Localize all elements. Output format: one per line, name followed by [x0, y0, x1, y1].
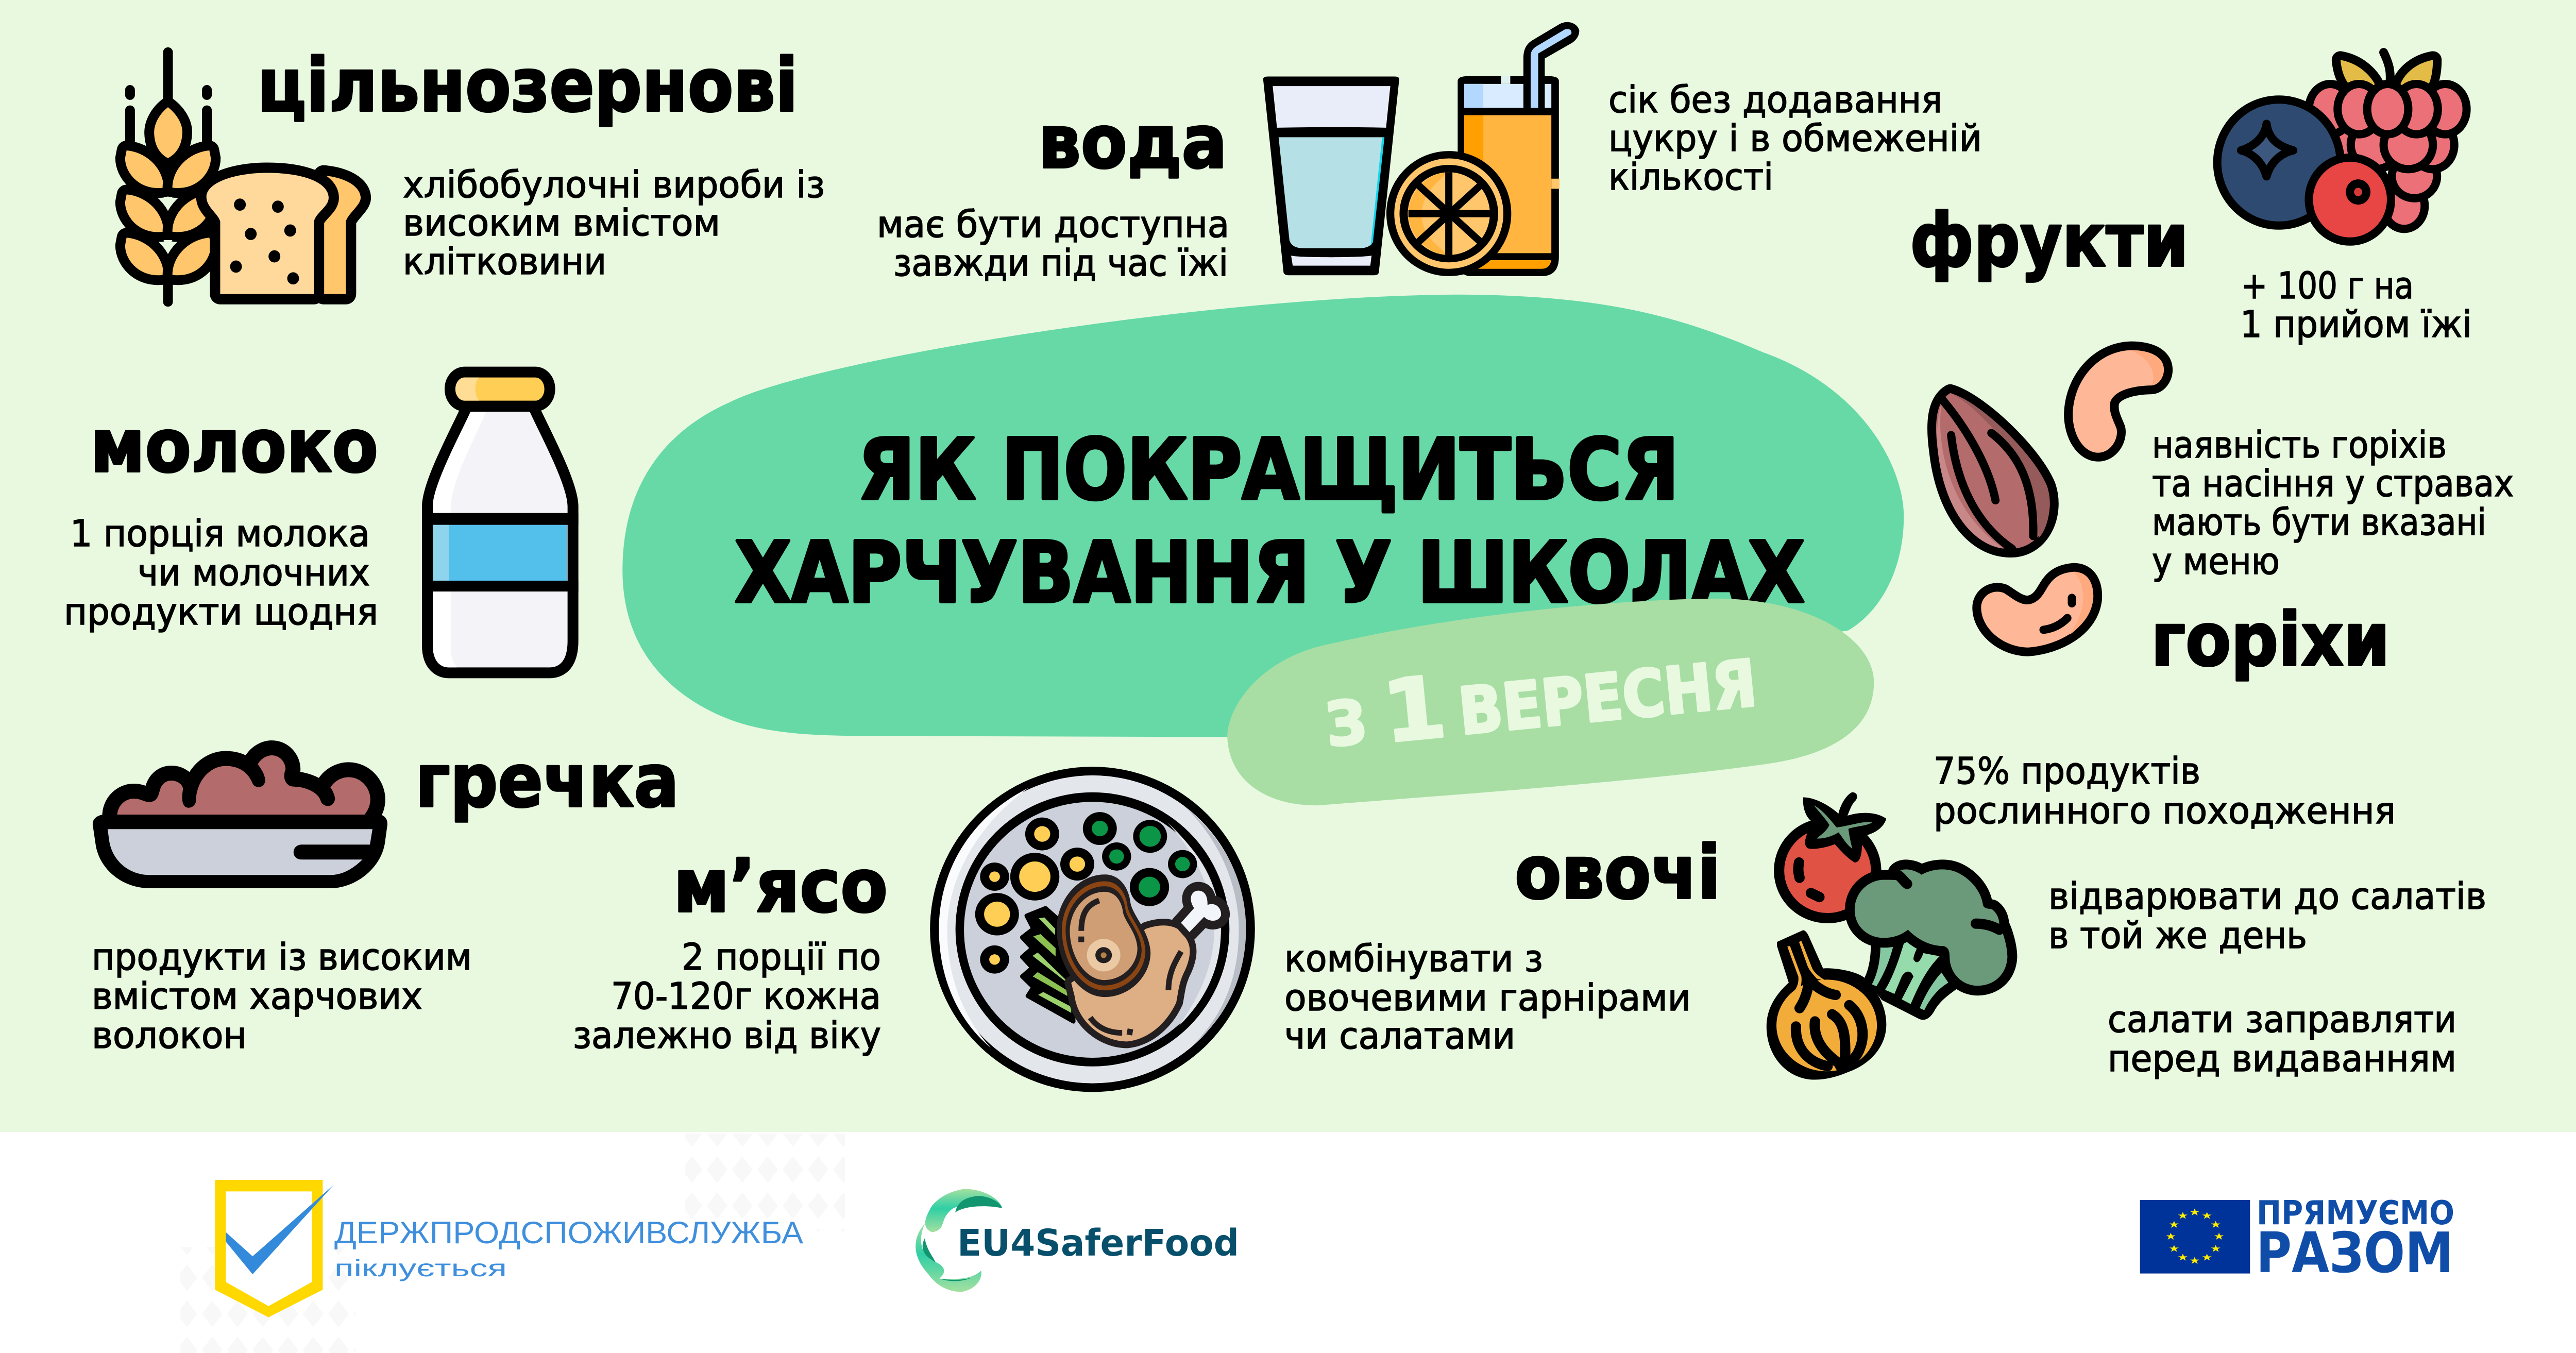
date blob — [1227, 599, 1874, 805]
text: water description: має бути доступна — [877, 203, 1229, 246]
logo text: ДЕРЖПРОДСПОЖИВСЛУЖБА — [334, 1215, 803, 1250]
main green blob — [622, 295, 1904, 737]
text: nuts description — [2152, 424, 2514, 583]
panel: vegetables — [1284, 750, 2486, 1080]
text: water description: завжди під час їжі — [893, 242, 1228, 284]
text: whole grain description — [403, 163, 825, 283]
panel: central title blobs — [622, 295, 1904, 805]
panel: fruits — [1910, 53, 2472, 346]
heading: meat: м’ясо — [673, 843, 888, 929]
icon: milk bottle — [422, 378, 579, 667]
text: juice description: кількості — [1608, 156, 1773, 198]
panel: milk — [64, 378, 579, 667]
icon: glass of water — [1263, 77, 1399, 275]
text: vegetables serving description — [1284, 937, 1691, 1057]
title — [735, 421, 1805, 622]
text: buckwheat description: продукти із високим — [92, 936, 472, 978]
text: fruits description: 1 прийом їжі — [2240, 303, 2472, 346]
text: juice description: сік без додавання — [1608, 78, 1942, 121]
icon: wheat and bread — [125, 52, 361, 302]
icon: green swoosh — [916, 1189, 1002, 1292]
logo text — [2256, 1194, 2454, 1286]
logo text: EU4SaferFood — [957, 1222, 1239, 1264]
text: milk description — [64, 512, 378, 633]
heading: milk: молоко — [90, 403, 378, 489]
panel: water and juice — [877, 22, 1982, 284]
text: fruits description — [2240, 264, 2472, 346]
text: meat description: 70-120г кожна — [611, 975, 881, 1018]
text: whole grain description: хлібобулочні вироби із — [403, 163, 825, 206]
icon: plate with meat and vegetables — [930, 767, 1255, 1092]
logo text — [334, 1215, 803, 1281]
icon: juice with straw and orange — [1386, 22, 1579, 276]
icon: shield with check — [215, 1180, 333, 1317]
text: juice description — [1608, 78, 1982, 198]
logo text: ПРЯМУЄМО — [2257, 1194, 2454, 1232]
subtitle: from September 1: 1 — [1378, 657, 1450, 762]
text: meat description — [573, 936, 881, 1057]
panel: whole grains — [125, 42, 825, 302]
icon: tomato, broccoli and onion — [1767, 792, 2007, 1080]
text: dress salads: салати заправляти — [2108, 998, 2456, 1041]
text: vegetables serving description: комбінувати з — [1284, 937, 1543, 980]
heading: whole grain: цільнозернові — [257, 42, 798, 128]
text: milk description: продукти щодня — [64, 590, 378, 633]
panel: nuts — [1936, 350, 2514, 683]
text: milk description: 1 порція молока — [70, 512, 370, 555]
logo text: піклується — [334, 1255, 507, 1281]
text: buckwheat description: вмістом харчових — [92, 975, 422, 1018]
logo text: РАЗОМ — [2256, 1221, 2453, 1286]
heading: nuts: горіхи — [2151, 597, 2390, 683]
text: nuts description: у меню — [2152, 540, 2280, 583]
text: nuts description: мають бути вказані — [2152, 501, 2486, 544]
heading: vegetables: овочі — [1515, 830, 1721, 916]
heading: fruits: фрукти — [1910, 197, 2189, 283]
footer logo: EU4SaferFood — [916, 1189, 1239, 1292]
text: buckwheat description: волокон — [92, 1014, 247, 1057]
background: white footer — [0, 1132, 2576, 1353]
title: ХАРЧУВАННЯ У ШКОЛАХ — [735, 525, 1805, 622]
panel: buckwheat — [92, 738, 679, 1057]
text: whole grain description: високим вмістом — [403, 201, 720, 244]
subtitle: from September 1: З — [1323, 686, 1369, 760]
text: vegetables serving description: овочевими гарнірами — [1284, 976, 1691, 1019]
text: boil for salads: відварювати до салатів — [2048, 875, 2486, 918]
text: plant products: 75% продуктів — [1934, 750, 2200, 792]
text: juice description: цукру і в обмеженій — [1608, 117, 1982, 160]
icon: berries — [2222, 53, 2463, 238]
text: plant products — [1934, 750, 2396, 832]
icon: EU flag — [2140, 1200, 2250, 1274]
text: boil for salads — [2048, 875, 2486, 957]
heading: buckwheat: гречка — [415, 738, 679, 824]
text: plant products: рослинного походження — [1934, 789, 2396, 832]
subtitle: from September 1: ВЕРЕСНЯ — [1455, 646, 1760, 750]
icon: bowl of buckwheat — [93, 755, 387, 888]
text: vegetables serving description: чи салатами — [1284, 1014, 1515, 1057]
text: whole grain description: клітковини — [403, 240, 606, 283]
footer logo: Derzhprodspozhyvsluzhba — [215, 1180, 803, 1317]
text: boil for salads: в той же день — [2048, 914, 2307, 957]
text: buckwheat description — [92, 936, 472, 1057]
text: milk description: чи молочних — [138, 551, 370, 594]
text: dress salads — [2108, 998, 2456, 1080]
text: fruits description: + 100 г на — [2241, 264, 2414, 307]
text: meat description: залежно від віку — [573, 1014, 881, 1057]
text: meat description: 2 порції по — [682, 936, 881, 978]
text: dress salads: перед видаванням — [2108, 1037, 2456, 1080]
text: nuts description: наявність горіхів — [2152, 424, 2447, 466]
title: ЯК ПОКРАЩИТЬСЯ — [858, 421, 1679, 519]
text: water description — [877, 203, 1229, 284]
text: nuts description: та насіння у стравах — [2152, 462, 2514, 505]
subtitle: from September 1 — [1323, 646, 1760, 762]
footer logo: Pryamuyemo Razom — [2140, 1194, 2454, 1286]
heading: water: вода — [1038, 99, 1227, 185]
panel: meat — [573, 767, 1255, 1092]
icon: almond and cashews — [1936, 350, 2164, 648]
